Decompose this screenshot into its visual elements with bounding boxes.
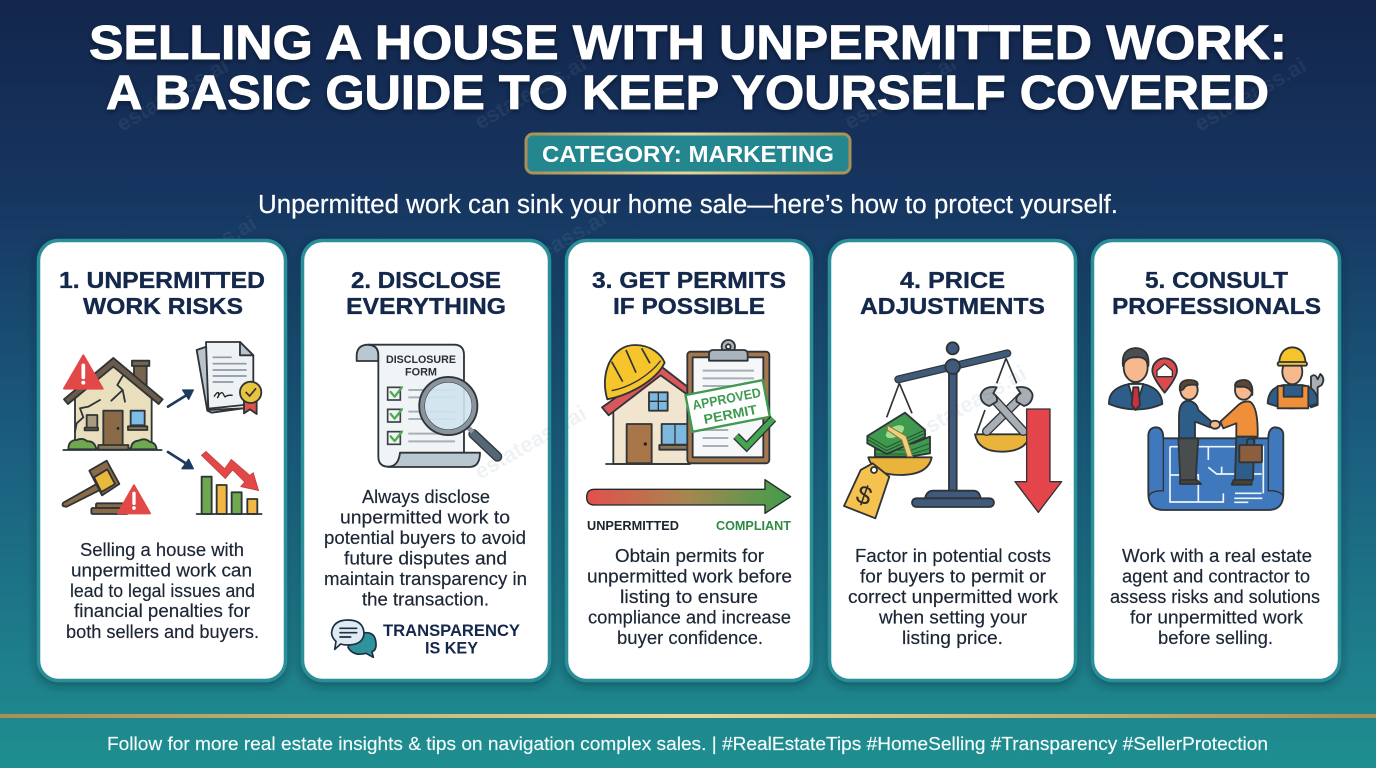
body text 5: Work with a real estate <box>1122 546 1312 566</box>
panel: 5 consult professionals <box>1092 240 1340 680</box>
body text 1: Selling a house with <box>80 540 244 560</box>
body text 1: both sellers and buyers. <box>66 622 259 642</box>
body text 1 <box>66 540 259 642</box>
callout text <box>383 622 520 658</box>
form title: DISCLOSURE <box>386 354 456 366</box>
price tag <box>844 463 889 518</box>
heading 5: PROFESSIONALS <box>1112 293 1321 319</box>
body text 5: for unpermitted work <box>1130 608 1304 628</box>
magnifier <box>422 379 497 457</box>
heading 2: EVERYTHING <box>346 293 506 319</box>
labels: progress: COMPLIANT <box>716 519 791 533</box>
icon: legal document <box>197 342 261 414</box>
heading 4 <box>860 267 1045 319</box>
icon: house with hard hat <box>602 345 690 464</box>
watermarks: estateass.ai <box>470 50 591 134</box>
icon: agent <box>1109 348 1162 410</box>
body text 5: assess risks and solutions <box>1110 587 1320 607</box>
heading 2 <box>346 267 506 319</box>
stamp: APPROVED <box>691 385 762 413</box>
body text 5: before selling. <box>1158 628 1273 648</box>
wrenches on right pan <box>975 387 1033 452</box>
heading 4: ADJUSTMENTS <box>860 293 1045 319</box>
body text 2: Always disclose <box>362 487 490 507</box>
callout text: IS KEY <box>425 640 478 658</box>
footer divider <box>0 714 1376 718</box>
heading 5: 5. CONSULT <box>1145 267 1289 293</box>
watermarks: estateass.ai <box>840 50 961 134</box>
body text 4: correct unpermitted work <box>848 587 1059 607</box>
price tag: $ <box>852 479 877 512</box>
heading 1: WORK RISKS <box>83 293 243 319</box>
progress arrow <box>587 480 791 513</box>
body text 2: future disputes and <box>344 548 507 568</box>
title: A BASIC GUIDE TO KEEP YOURSELF COVERED <box>106 67 1269 120</box>
category badge: CATEGORY: MARKETING <box>542 141 834 167</box>
title: SELLING A HOUSE WITH UNPERMITTED WORK: <box>89 17 1287 70</box>
body text 3: Obtain permits for <box>615 546 764 566</box>
heading 2: 2. DISCLOSE <box>351 267 501 293</box>
watermarks: estateass.ai <box>112 52 233 136</box>
panel: 1 unpermitted work risks <box>38 240 286 680</box>
heading 4: 4. PRICE <box>900 267 1005 293</box>
body text 2: potential buyers to avoid <box>324 528 526 548</box>
stamp: PERMIT <box>702 402 758 427</box>
form title: FORM <box>405 366 437 378</box>
title <box>89 17 1287 120</box>
checklist <box>388 387 455 444</box>
icon: clipboard <box>687 340 769 463</box>
body text 3: buyer confidence. <box>617 628 763 648</box>
icon: worker <box>1268 347 1323 408</box>
panel: 2 disclose everything <box>302 240 550 680</box>
body text 3: listing to ensure <box>620 587 758 607</box>
category badge <box>526 134 850 173</box>
body text 3: unpermitted work before <box>587 566 792 586</box>
illustration: balance scale <box>844 342 1062 518</box>
labels: progress: UNPERMITTED <box>587 519 679 533</box>
watermarks: estateass.ai <box>140 210 261 294</box>
body text 4 <box>848 546 1059 648</box>
body text 2: the transaction. <box>362 590 489 610</box>
body text 2 <box>324 487 527 610</box>
body text 4: listing price. <box>902 628 1003 648</box>
panel: 3 get permits <box>566 240 812 680</box>
panel: 4 price adjustments <box>830 240 1076 680</box>
stamp <box>685 380 770 432</box>
heading 1: 1. UNPERMITTED <box>59 267 265 293</box>
heading 3 <box>592 267 786 319</box>
heading 5 <box>1112 267 1321 319</box>
icon: warning small <box>118 485 150 513</box>
transparency callout <box>332 620 520 658</box>
body text 1: lead to legal issues and <box>70 581 255 601</box>
watermarks: estateass.ai <box>1190 52 1311 136</box>
body text 2: unpermitted work to <box>340 508 510 528</box>
scale <box>887 342 1017 507</box>
labels: progress <box>587 519 791 533</box>
icon: warning <box>64 355 103 389</box>
money on left pan <box>867 413 932 475</box>
icon: check <box>736 419 773 447</box>
body text 5 <box>1110 546 1320 648</box>
illustration: professionals <box>1109 347 1323 510</box>
icon: handshake figures <box>1178 380 1262 485</box>
footer text: Follow for more real estate insights & tips on navigation complex sales. | #RealEstateTips #HomeSelling #Transparency #SellerProtection <box>107 734 1268 754</box>
watermarks <box>112 50 1311 294</box>
callout text: TRANSPARENCY <box>383 622 520 640</box>
form title <box>386 354 456 378</box>
arrows <box>168 390 193 469</box>
watermarks: estateass.ai <box>490 205 611 289</box>
icon: falling chart <box>197 451 262 514</box>
icon: cracked house <box>63 358 163 450</box>
body text 3 <box>587 546 792 648</box>
heading 3: 3. GET PERMITS <box>592 267 786 293</box>
card watermarks: estateass.ai <box>470 400 591 484</box>
body text 2: maintain transparency in <box>324 569 527 589</box>
body text 4: for buyers to permit or <box>860 566 1046 586</box>
icon: speech bubbles <box>332 620 376 657</box>
icon: down arrow <box>1015 409 1062 512</box>
card watermarks <box>470 360 1031 484</box>
body text 1: unpermitted work can <box>71 560 252 580</box>
illustration: permit <box>587 340 791 513</box>
icon: disclosure form <box>357 345 497 467</box>
heading 3: IF POSSIBLE <box>613 293 765 319</box>
body text 4: when setting your <box>878 608 1027 628</box>
illustration: risks <box>63 342 262 514</box>
heading 1 <box>59 267 265 319</box>
subtitle: Unpermitted work can sink your home sale—here’s how to protect yourself. <box>258 191 1118 219</box>
icon: blueprint <box>1148 427 1283 510</box>
icon: location pin <box>1152 358 1177 393</box>
icon: gavel <box>63 461 128 514</box>
body text 1: financial penalties for <box>74 601 250 621</box>
body text 4: Factor in potential costs <box>855 546 1051 566</box>
card watermarks: estateass.ai <box>910 360 1031 444</box>
body text 3: compliance and increase <box>588 608 791 628</box>
body text 5: agent and contractor to <box>1122 566 1310 586</box>
